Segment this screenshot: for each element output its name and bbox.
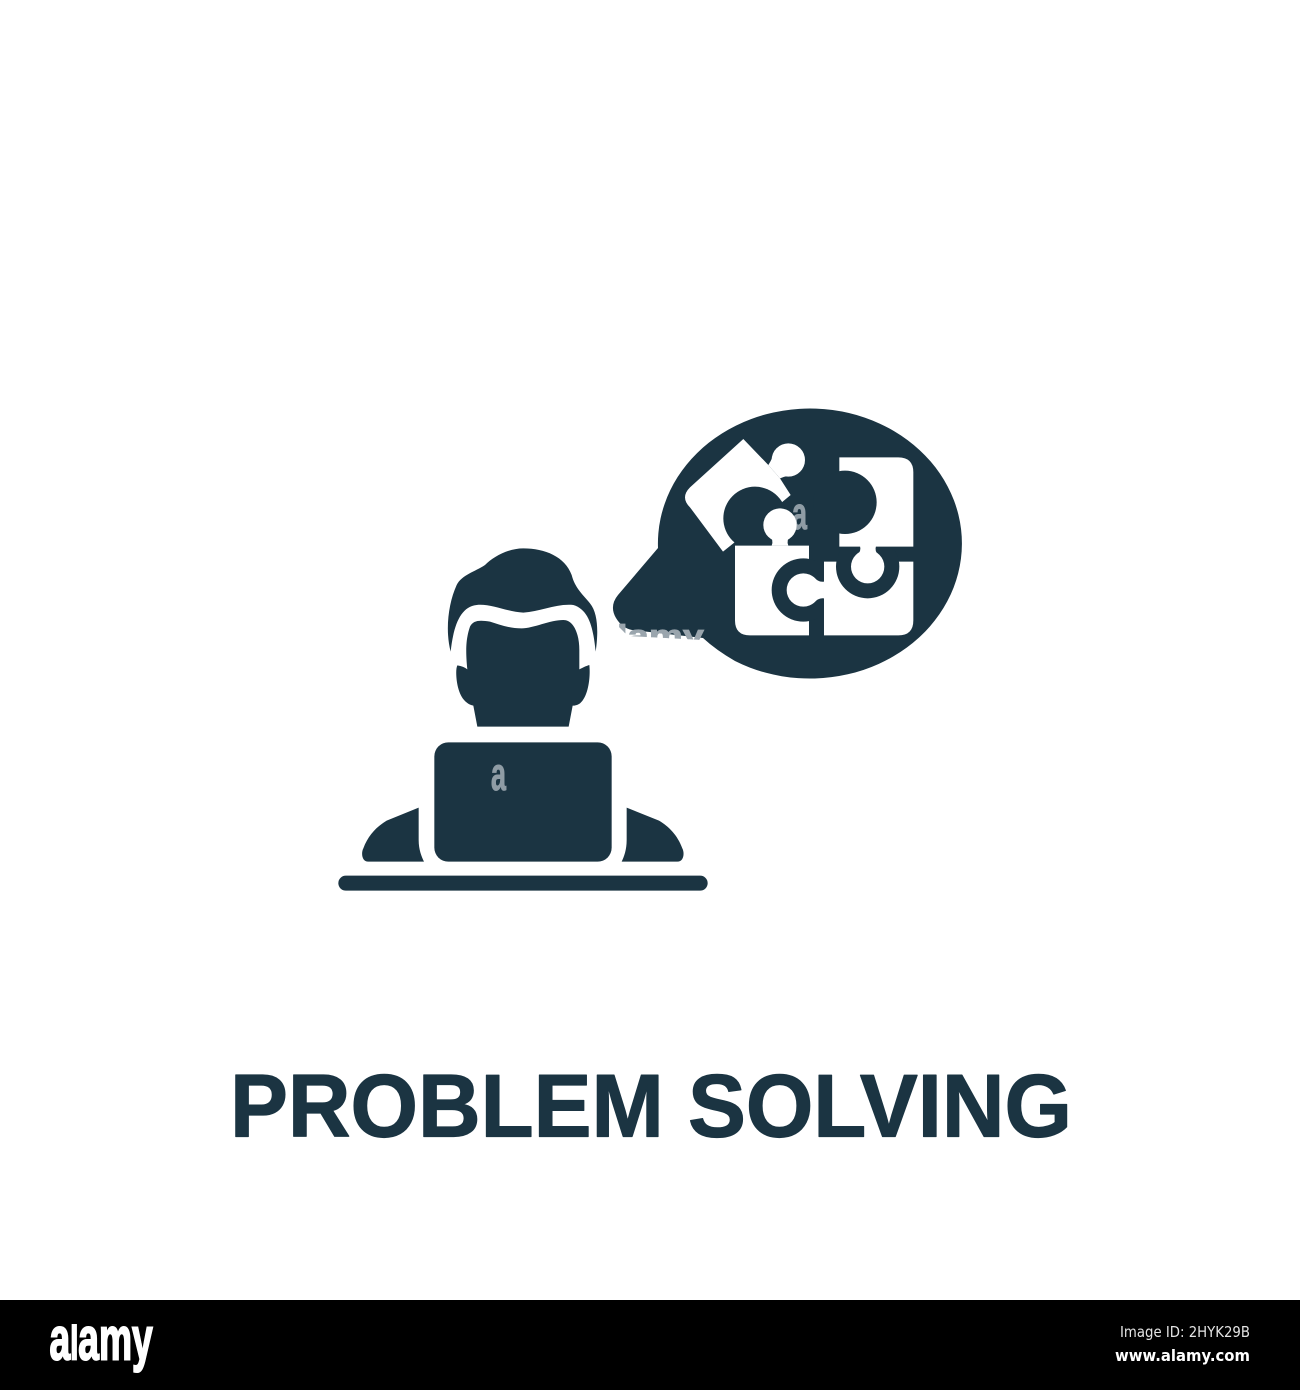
watermark on laptop: a <box>491 748 506 800</box>
hair <box>448 548 597 652</box>
laptop <box>434 742 612 862</box>
logo: alamy <box>50 1305 153 1373</box>
image id: Image ID: 2HYK29B <box>1120 1323 1250 1341</box>
footer bar <box>0 1300 1300 1390</box>
title: PROBLEM SOLVING <box>230 1056 1072 1156</box>
watermark fragment on bubble tail: lamy <box>617 620 704 652</box>
desk <box>338 876 708 891</box>
speech bubble <box>613 409 962 679</box>
right shoulder <box>622 808 684 862</box>
face and neck <box>456 620 590 727</box>
puzzle pieces <box>685 439 913 635</box>
puzzle pieces: a <box>792 488 808 539</box>
icon: speech bubble with puzzle <box>613 409 962 679</box>
website: www.alamy.com <box>1115 1346 1250 1365</box>
icon: person at laptop <box>338 548 708 891</box>
infographic canvas <box>0 408 1300 1390</box>
left shoulder <box>362 808 424 862</box>
